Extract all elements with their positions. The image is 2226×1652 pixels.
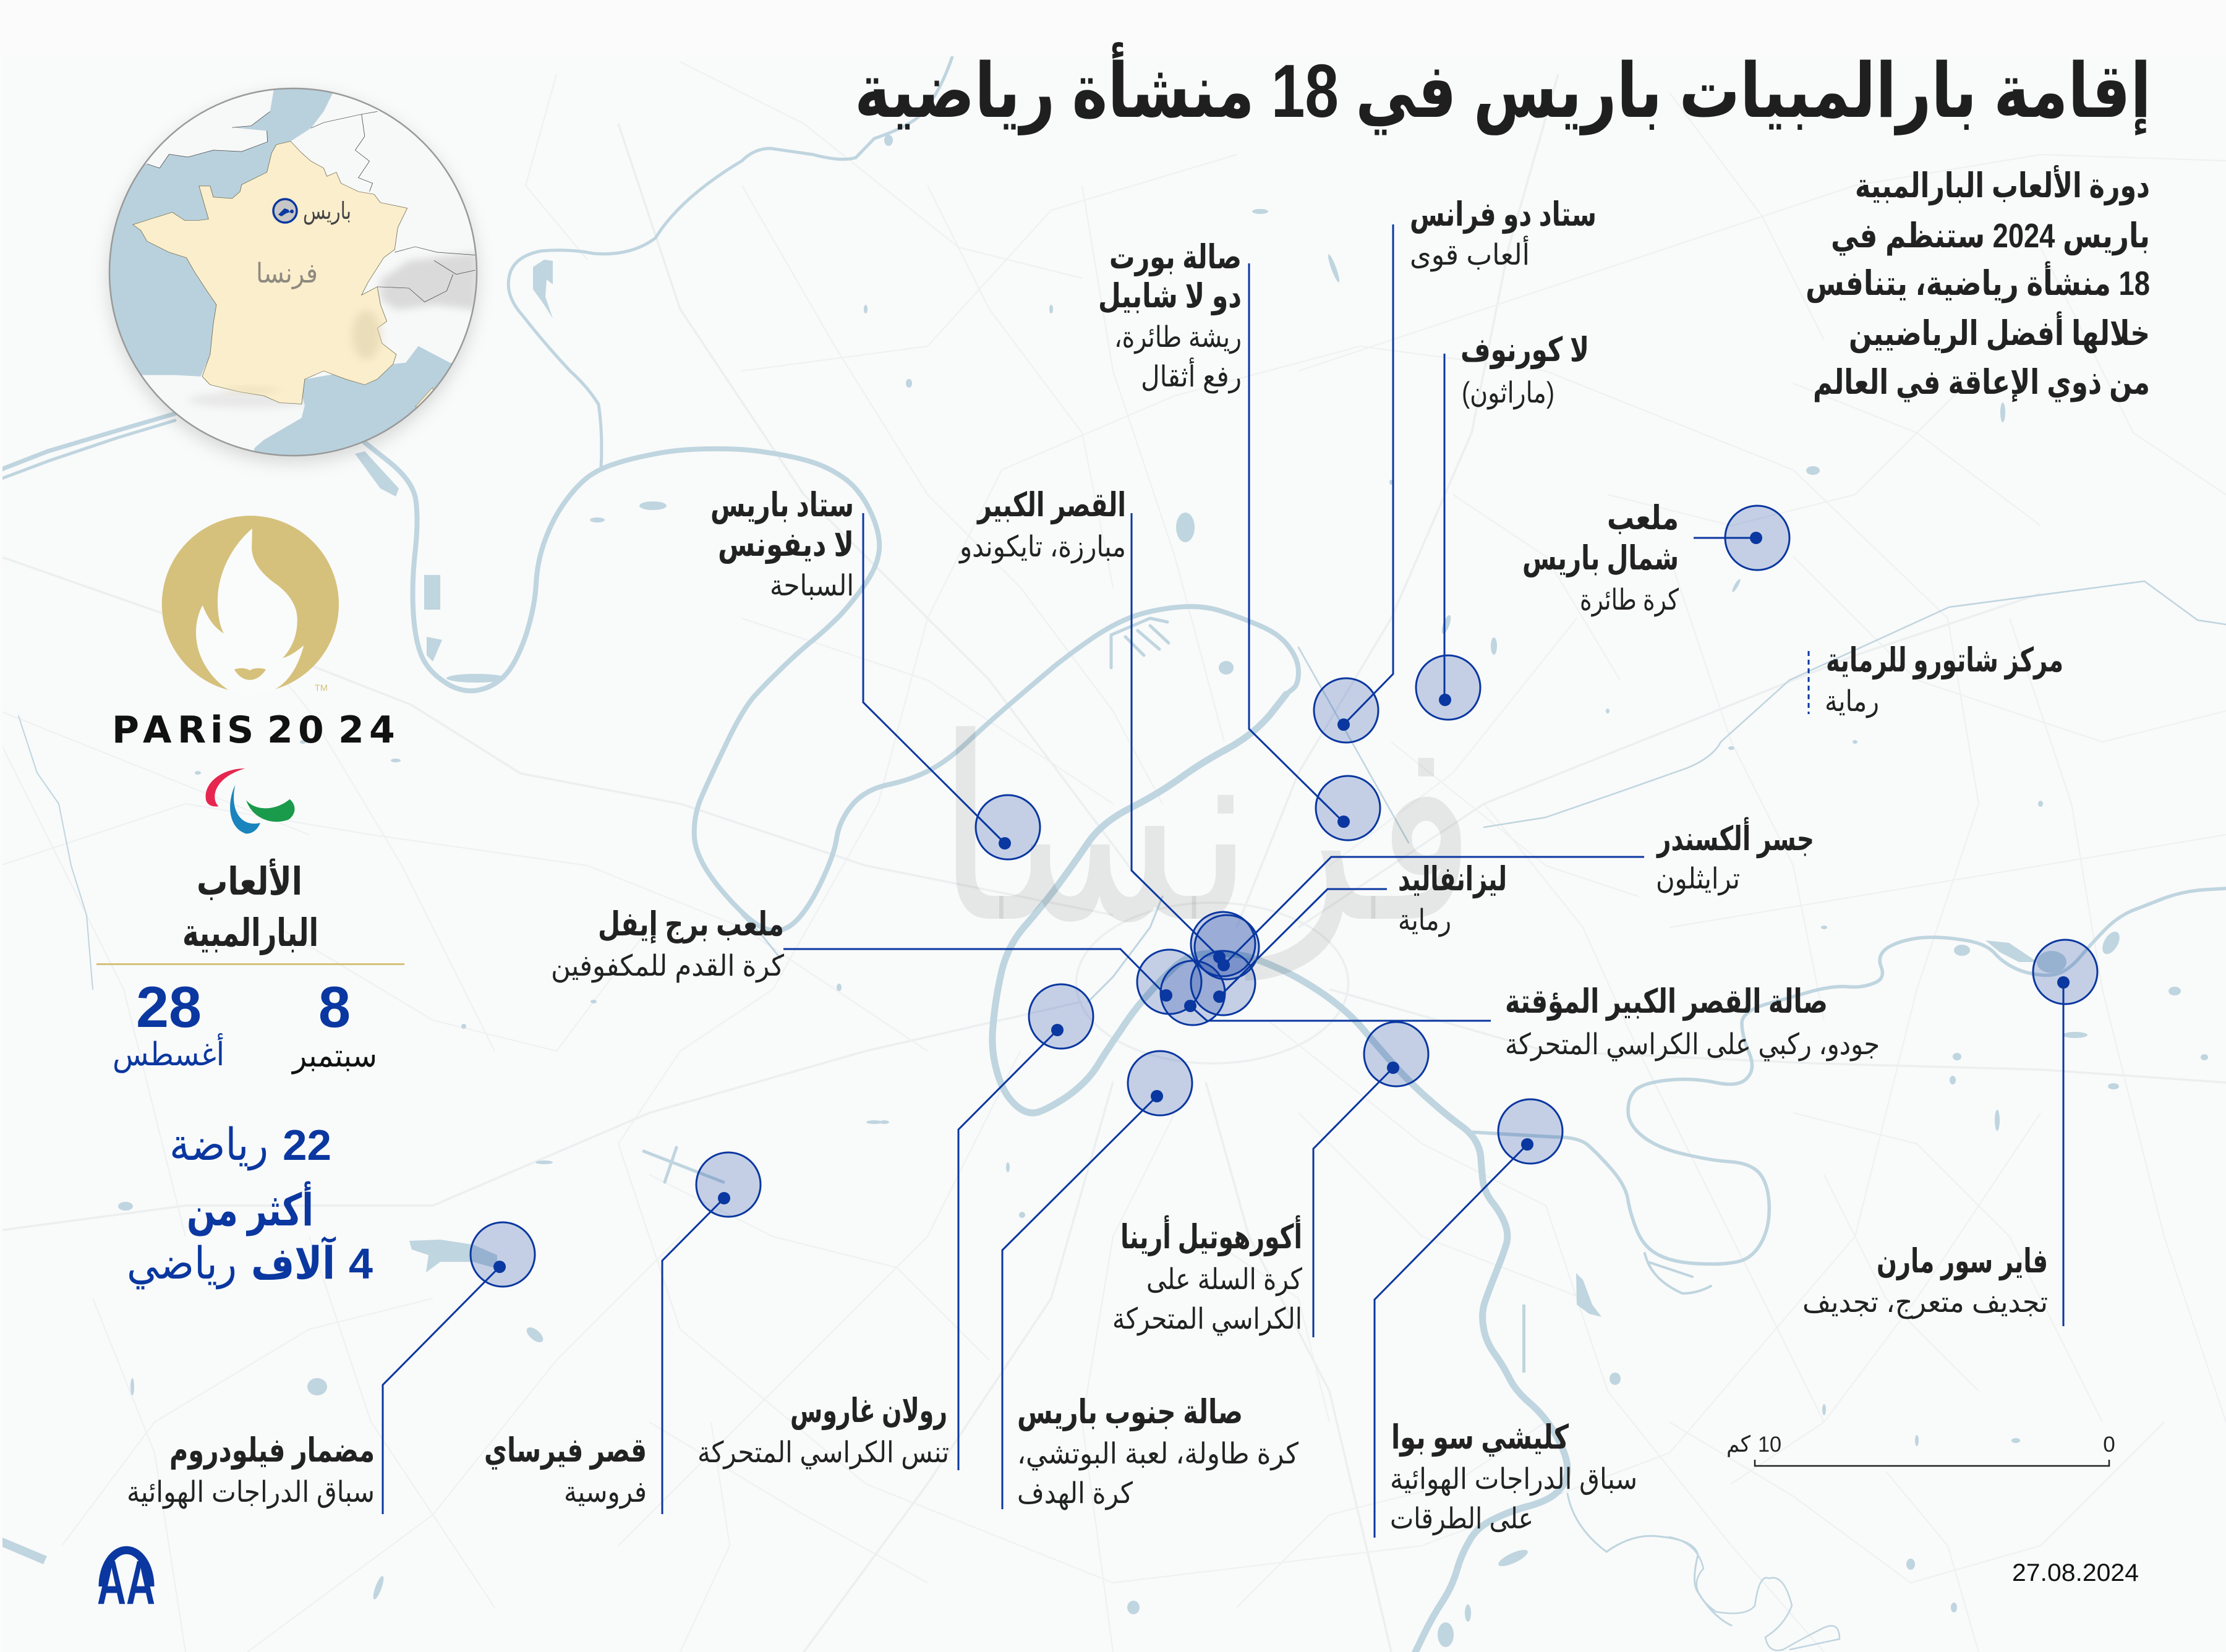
label: South Paris Arena: كرة طاولة، لعبة البوتشي، xyxy=(1017,1437,1299,1471)
side heading: البارالمبية xyxy=(182,912,318,955)
label: Vaires-sur-Marne: فاير سور مارن xyxy=(1877,1243,2048,1280)
venue labels xyxy=(127,196,2063,1536)
label: Accor Hotel Arena: الكراسي المتحركة xyxy=(1112,1302,1302,1336)
dates: سبتمبر xyxy=(291,1038,377,1075)
stats: رياضي xyxy=(127,1239,237,1290)
label: Invalides xyxy=(1398,861,1507,937)
label: Pont Alexandre III: جسر ألكسندر xyxy=(1656,817,1814,858)
stats: آلاف xyxy=(251,1236,336,1288)
label: Stade de France: ألعاب قوى xyxy=(1410,236,1530,272)
logo: AA xyxy=(97,1548,155,1617)
intro text: خلالها أفضل الرياضيين xyxy=(1849,311,2150,354)
label: Chateauroux Shooting Centre xyxy=(1825,642,2063,718)
label: Versailles xyxy=(484,1432,647,1509)
label: La Courneuve: لا كورنوف xyxy=(1461,331,1589,369)
label: Accor Hotel Arena: كرة السلة على xyxy=(1146,1262,1303,1296)
scale bar: 10 xyxy=(1758,1433,1781,1457)
label: Pont Alexandre III: ترايثلون xyxy=(1656,862,1740,896)
label: Velodrome: مضمار فيلودروم xyxy=(169,1432,375,1470)
label: Paris La Defense Arena: السباحة xyxy=(770,569,854,602)
globe label: France: فرنسا xyxy=(256,258,318,289)
label: Roland Garros: تنس الكراسي المتحركة xyxy=(697,1436,949,1470)
label: North Paris Arena: ملعب xyxy=(1607,500,1679,537)
label: Eiffel Tower Stadium: ملعب برج إيفل xyxy=(598,906,784,943)
label: North Paris Arena: كرة طائرة xyxy=(1580,583,1679,617)
label: Vaires-sur-Marne xyxy=(1802,1243,2048,1319)
label: Versailles: قصر فيرساي xyxy=(484,1432,647,1470)
label: Invalides: ليزانفاليد xyxy=(1398,861,1507,898)
label: Roland Garros xyxy=(697,1392,949,1470)
label: Chateauroux Shooting Centre: رماية xyxy=(1825,684,1879,718)
label: Paris La Defense Arena: لا ديفونس xyxy=(718,526,854,564)
label: North Paris Arena xyxy=(1522,500,1679,617)
logo wordmark: PARiS 2024 xyxy=(112,709,395,752)
label: North Paris Arena: شمال باريس xyxy=(1522,540,1679,577)
France xyxy=(133,142,407,404)
intro text: باريس 2024 ستنظم في xyxy=(1831,216,2150,256)
dates: 28 xyxy=(136,974,202,1039)
label: Porte de La Chapelle: دو لا شابيل xyxy=(1098,278,1242,315)
dates: 8 xyxy=(318,974,351,1039)
label: Invalides: رماية xyxy=(1398,903,1451,937)
logo: Paris 2024 emblem: TM xyxy=(315,683,328,693)
locator globe xyxy=(81,79,478,470)
logo: Paris 2024 emblem xyxy=(162,516,339,696)
label: Eiffel Tower Stadium: كرة القدم للمكفوفين xyxy=(551,949,785,983)
dates: أغسطس xyxy=(113,1033,224,1073)
label: Clichy-sous-Bois: على الطرقات xyxy=(1390,1502,1533,1536)
label: Grand Palais xyxy=(958,487,1126,564)
stats: رياضة xyxy=(169,1120,268,1171)
label: Grand Palais: القصر الكبير xyxy=(976,487,1126,524)
label: Clichy-sous-Bois: سباق الدراجات الهوائية xyxy=(1390,1462,1637,1496)
label: Vaires-sur-Marne: تجديف متعرج، تجديف xyxy=(1802,1285,2048,1319)
dates xyxy=(113,974,377,1075)
venue bubbles xyxy=(471,506,2097,1287)
side heading: الألعاب xyxy=(197,858,302,903)
scale bar xyxy=(1726,1431,2115,1466)
label: Accor Hotel Arena: أكورهوتيل أرينا xyxy=(1120,1215,1302,1256)
label: Clichy-sous-Bois xyxy=(1390,1419,1637,1536)
intro text: 18 منشأة رياضية، يتنافس xyxy=(1806,261,2150,303)
intro text xyxy=(1806,165,2150,402)
label: Pont Alexandre III xyxy=(1656,817,1814,896)
logo: AA: AA xyxy=(97,1548,155,1617)
label: South Paris Arena: صالة جنوب باريس xyxy=(1017,1394,1243,1431)
label: Grand Palais Ephemere xyxy=(1505,983,1880,1062)
label: South Paris Arena xyxy=(1017,1394,1299,1510)
label: Chateauroux Shooting Centre: مركز شاتورو للرماية xyxy=(1826,642,2063,679)
stats xyxy=(127,1120,373,1290)
globe label: Paris: باريس xyxy=(303,198,351,224)
label: Eiffel Tower Stadium xyxy=(551,906,785,983)
label: Porte de La Chapelle: ريشة طائرة، xyxy=(1114,320,1242,354)
label: Porte de La Chapelle: صالة بورت xyxy=(1109,239,1242,276)
label: Porte de La Chapelle xyxy=(1098,239,1242,394)
label: Porte de La Chapelle: رفع أثقال xyxy=(1141,357,1242,394)
label: Stade de France xyxy=(1410,196,1597,272)
icon: paralympic agitos xyxy=(206,769,294,833)
label: Grand Palais Ephemere: صالة القصر الكبير المؤقتة xyxy=(1505,983,1828,1021)
label: Roland Garros: رولان غاروس xyxy=(790,1392,947,1430)
label: Velodrome: سباق الدراجات الهوائية xyxy=(127,1475,375,1509)
watermark: France: فرنسا xyxy=(936,689,1477,982)
stats: 4 xyxy=(349,1240,373,1288)
stats: 22 xyxy=(283,1121,331,1169)
label: Velodrome xyxy=(127,1432,375,1509)
label: Accor Hotel Arena xyxy=(1112,1215,1303,1336)
label: Clichy-sous-Bois: كليشي سو بوا xyxy=(1391,1419,1569,1457)
side heading xyxy=(182,858,318,955)
marker: Paris xyxy=(273,199,297,223)
label: La Courneuve: (ماراثون) xyxy=(1462,376,1554,410)
label: Paris La Defense Arena xyxy=(710,487,854,602)
scale bar: كم xyxy=(1726,1431,1751,1457)
leader lines xyxy=(383,224,2063,1538)
label: Grand Palais Ephemere: جودو، ركبي على الكراسي المتحركة xyxy=(1505,1028,1880,1062)
stats: أكثر من xyxy=(187,1181,313,1237)
label: Paris La Defense Arena: ستاد باريس xyxy=(710,487,854,524)
label: La Courneuve xyxy=(1461,331,1589,410)
label: South Paris Arena: كرة الهدف xyxy=(1017,1476,1133,1510)
label: Grand Palais: مبارزة، تايكوندو xyxy=(958,530,1126,564)
label: Versailles: فروسية xyxy=(564,1475,647,1509)
intro text: دورة الألعاب البارالمبية xyxy=(1855,165,2150,206)
scale bar: 0 xyxy=(2103,1433,2115,1457)
label: Stade de France: ستاد دو فرانس xyxy=(1410,196,1597,234)
date: 27.08.2024 xyxy=(2012,1559,2139,1586)
